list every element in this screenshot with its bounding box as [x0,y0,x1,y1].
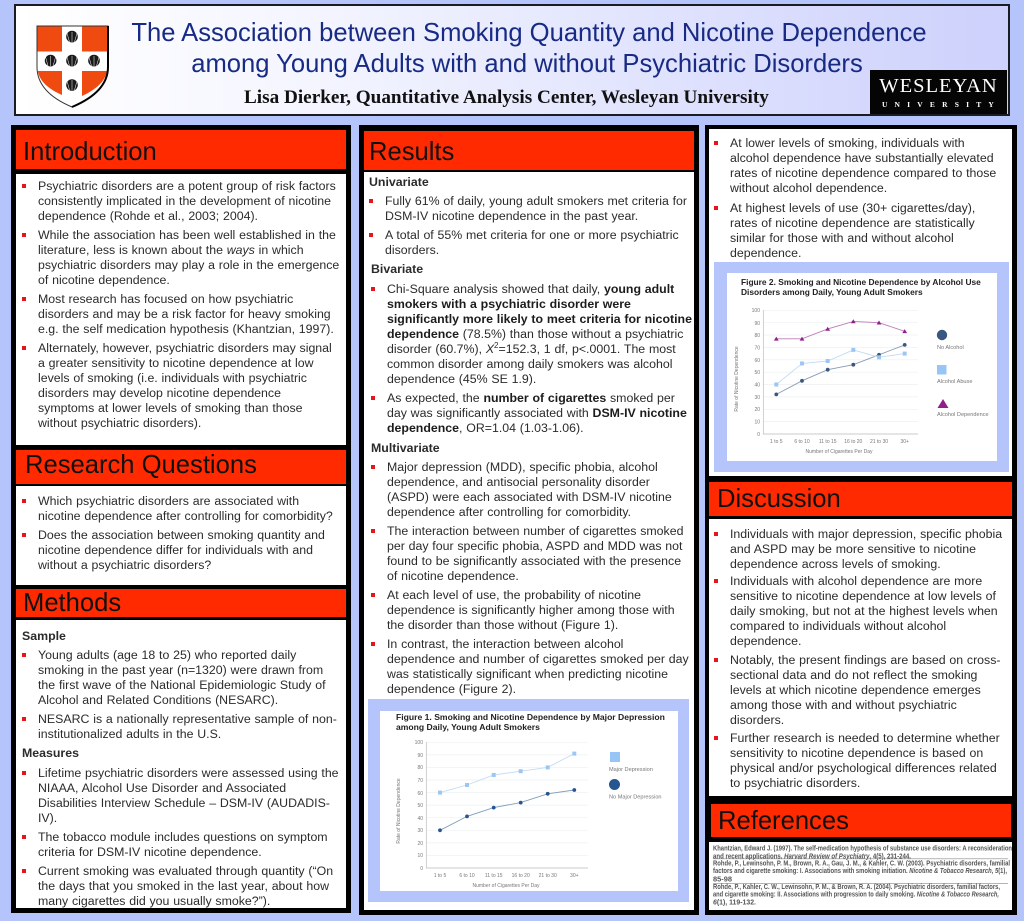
results text: smokers with a psychiatric disorder were [387,297,631,311]
panel: introduction [16,130,346,445]
introduction text: dependence (Rohde et al., 2003; 2004). [38,209,258,223]
introduction text: While the association has been well established in the [38,228,336,242]
heading: Introduction [16,130,346,169]
chart: figure 1: 40 [417,816,423,822]
panel: discussion [709,482,1012,796]
introduction text: symptoms at lower levels of smoking than those [38,401,303,415]
references text: and cigarette smoking: II. Associations with progression to daily smoking. Nicotine & Tobacco Research, [713,890,999,899]
heading: Research Questions: Research Questions [25,451,257,479]
logo: Wesleyan University: WESLEYAN [879,75,998,97]
panel: results continued: rates of nicotine dependence are statistically [730,216,975,230]
chart: figure 2: 10 [754,420,760,426]
title: among Young Adults with and without Psychiatric Disorders [191,50,863,78]
discussion text: dependence. [730,634,801,648]
panel: results continued: At highest levels of use (30+ cigarettes/day), [730,201,975,215]
results text: per day four specific phobia, ASPD and MDD was not [387,539,682,553]
chart: figure 1: Figure 1. Smoking and Nicotine Dependence by Major Depression [396,712,665,722]
discussion text: daily smoking, but not at the highest levels when [730,604,998,618]
title [131,19,927,78]
panel: results continued [709,129,1012,476]
introduction text: e.g. the self medication hypothesis (Khantzian, 1997). [38,322,334,336]
methods text: smoking in the past year (n=1320) were drawn from [38,663,323,677]
results text: At each level of use, the probability of nicotine [387,588,641,602]
chart: figure 1: 50 [417,803,423,809]
discussion text: Further research is needed to determine whether [730,731,1000,745]
results text: dependence and number of cigarettes smoked per day [387,652,689,666]
introduction text: Most research has focused on how psychiatric [38,292,293,306]
references text: 85-98 [713,874,732,883]
research questions text: nicotine dependence after controlling for comorbidity? [38,509,333,523]
chart: figure 1: 10 [417,853,423,859]
methods text: Lifetime psychiatric disorders were assessed using the [38,766,339,780]
chart: figure 2: 1 to 5 [770,439,783,445]
chart: figure 2: 30+ [900,439,909,445]
discussion text: compared to individuals without alcohol [730,619,946,633]
discussion text: sensitive to nicotine dependence at low levels of [730,589,996,603]
logo: Wesleyan University: UNIVERSITY [882,100,1001,109]
chart: figure 1: 16 to 20 [512,873,530,879]
chart: figure 2: 6 to 10 [794,439,810,445]
panel: results continued: dependence. [730,246,801,260]
results text: In contrast, the interaction between alcohol [387,637,623,651]
results text: disorder (60.7%), X2=152.3, 1 df, p<.0001. The most [387,341,676,356]
column 1 backing [11,125,351,913]
introduction text: Alternately, however, psychiatric disorders may signal [38,341,332,355]
chart: figure 1: 6 to 10 [459,873,475,879]
results text: was statistically significant when predicting nicotine [387,667,668,681]
chart: figure 1: 20 [417,841,423,847]
chart: figure 1: Number of Cigarettes Per Day [473,883,540,889]
panel: references [709,804,1012,910]
chart: figure 2: 16 to 20 [844,439,863,445]
research questions text: without a psychiatric disorders? [38,558,211,572]
introduction text: consistently implicated in the development of nicotine [38,194,331,208]
results text: dependence (78.5%) than those without a psychiatric [387,327,683,341]
chart: figure 1: No Major Depression [609,794,662,800]
panel: methods [16,589,346,908]
discussion text: Individuals with alcohol dependence are more [730,574,982,588]
discussion text [709,519,1012,796]
chart: figure 1: Rate of Nicotine Dependence [396,778,402,844]
results text: DSM-IV nicotine dependence in the past year. [385,209,638,223]
discussion text: to psychiatric disorders. [730,776,860,790]
methods text: The tobacco module includes questions on symptom [38,830,328,844]
chart: figure 2: Figure 2. Smoking and Nicotine Dependence by Alcohol Use [741,277,981,287]
methods text: the days that you smoked in the last year, about how [38,879,329,893]
heading: Discussion: Discussion [717,485,841,513]
heading: Results [364,131,694,170]
chart: figure 2: Number of Cigarettes Per Day [806,449,873,455]
chart: figure 1: 1 to 5 [434,873,446,879]
introduction text: literature, less is known about the ways in which [38,243,304,257]
chart: figure 2: 70 [754,346,760,352]
chart: figure 2: 11 to 15 [819,439,837,445]
results text: As expected, the number of cigarettes smoked per [387,391,675,405]
results text: dependence (Figure 2). [387,682,516,696]
panel: results [364,131,694,910]
introduction text [16,174,346,445]
heading: Introduction: Introduction [23,138,157,166]
introduction text: disorders and may be a risk factor for heavy smoking [38,307,331,321]
results text: Univariate [369,175,429,189]
introduction text: levels of smoking (i.e. individuals with psychiatric [38,371,307,385]
introduction text: of nicotine dependence. [38,273,170,287]
chart: figure 1: 11 to 15 [485,873,503,879]
chart: figure 1: 30 [417,828,423,834]
research questions text: Does the association between smoking quantity and [38,528,325,542]
results text: of nicotine dependence. [387,569,519,583]
chart: figure 2: 40 [754,382,760,388]
discussion text: sensitivity to nicotine dependence is based on [730,746,983,760]
chart: figure 1: Major Depression [609,767,653,773]
methods text: NIAAA, Alcohol Use Disorder and Associated [38,781,286,795]
discussion text: dependence across levels of smoking. [730,557,941,571]
panel: results continued: without alcohol dependence. [730,181,887,195]
chart: figure 1: 90 [417,753,423,759]
introduction text: disorders may develop nicotine dependence [38,386,281,400]
icon: university shield [36,26,109,108]
chart: figure 2: 50 [754,370,760,376]
chart: figure 1: 21 to 30 [539,873,557,879]
introduction text: without psychiatric disorders). [38,416,201,430]
research questions text: Which psychiatric disorders are associated with [38,494,299,508]
methods text [16,620,346,908]
results text: dependence is significantly higher among those with [387,603,675,617]
heading: References: References [718,807,849,835]
heading: Research Questions [16,450,346,484]
results text: significantly more likely to meet criteria for nicotine [387,312,692,326]
methods text: many cigarettes did you usually smoke?”). [38,894,270,908]
chart: figure 2: 90 [754,321,760,327]
results text: Multivariate [371,441,440,455]
chart: figure 2: 100 [752,308,760,314]
discussion text: physical and/or psychological differences related [730,761,997,775]
chart: figure 2: 20 [754,407,760,413]
heading: Methods [16,589,346,617]
discussion text: sectional data and do not reflect the smoking [730,668,977,682]
discussion text: levels at which nicotine dependence emerges [730,683,981,697]
chart: figure 2: 21 to 30 [870,439,888,445]
research questions text: nicotine dependence differ for individuals with and [38,543,313,557]
chart: figure 2: Disorders among Daily, Young Adult Smokers [741,287,923,297]
introduction text: a greater sensitivity to nicotine dependence at low [38,356,314,370]
methods text: IV). [38,811,57,825]
methods text: Measures [22,746,79,760]
header banner [14,4,1010,116]
chart: figure 1: 0 [420,866,423,872]
chart: figure 2: 60 [754,358,760,364]
column 3 backing [705,125,1017,915]
methods text: Alcohol and Related Conditions (NESARC). [38,693,278,707]
results text: A total of 55% met criteria for one or more psychiatric [385,228,679,242]
panel: results continued: similar for those with and without alcohol [730,231,954,245]
results text: (ASPD) were each associated with DSM-IV nicotine [387,490,672,504]
methods text: criteria for DSM-IV nicotine dependence. [38,845,262,859]
panel: research questions [16,450,346,585]
methods text: Disabilities Interview Schedule – DSM-IV (AUDADIS- [38,796,330,810]
references text: factors and cigarette smoking: I. Associations with smoking initiation. Nicotine & Tobacco Research, 5(1), [713,866,1007,875]
discussion text: among those with and without psychiatric [730,698,957,712]
chart: figure 1: 70 [417,778,423,784]
methods text: the first wave of the National Epidemiologic Study of [38,678,326,692]
author line: Lisa Dierker, Quantitative Analysis Center, Wesleyan University [244,87,769,108]
heading: Methods: Methods [23,589,121,617]
results text: Fully 61% of daily, young adult smokers met criteria for [385,194,687,208]
results text: dependence (45% SE 1.9). [387,372,536,386]
chart: figure 1 [368,699,689,902]
results text: common disorder among daily smokers was alcohol [387,357,672,371]
panel: results continued: At lower levels of smoking, individuals with [730,136,965,150]
chart: figure 2: Alcohol Abuse [937,379,972,385]
results text: dependence, and antisocial personality disorder [387,475,650,489]
references text [709,842,1012,910]
chart: figure 1: 100 [415,740,423,746]
methods text: Young adults (age 18 to 25) who reported daily [38,648,296,662]
chart: figure 1: 80 [417,765,423,771]
results text: day was significantly associated with DSM-IV nicotine [387,406,687,420]
chart: figure 1: among Daily, Young Adult Smokers [396,722,540,732]
methods text: Current smoking was evaluated through quantity (“On [38,864,333,878]
chart: figure 1: 30+ [570,873,579,879]
results text: Major depression (MDD), specific phobia, alcohol [387,460,658,474]
heading: Discussion [709,482,1012,516]
results text: dependence after controlling for comorbidity. [387,505,631,519]
chart: figure 2: No Alcohol [937,345,964,351]
chart: figure 2: 0 [757,432,760,438]
results text: The interaction between number of cigarettes smoked [387,524,683,538]
references text: and recent applications. Harvard Review of Psychiatry, 4(5), 231-244. [713,851,911,860]
title: The Association between Smoking Quantity and Nicotine Dependence [131,19,927,47]
methods text: Sample [22,629,66,643]
logo: Wesleyan University [870,70,1007,114]
discussion text: Individuals with major depression, specific phobia [730,527,1002,541]
chart: figure 2: Rate of Nicotine Dependence [734,346,740,412]
panel: results continued: rates of nicotine dependence compared to those [730,166,996,180]
introduction text: psychiatric disorders may play a role in the emergence [38,258,339,272]
discussion text: Notably, the present findings are based on cross- [730,653,1001,667]
results text: the disorder than those without (Figure 1). [387,618,618,632]
chart: figure 1: 60 [417,791,423,797]
discussion text: disorders. [730,713,784,727]
results text: Chi-Square analysis showed that daily, young adult [387,282,674,296]
introduction text: Psychiatric disorders are a potent group of risk factors [38,179,336,193]
methods text: NESARC is a nationally representative sample of non- [38,712,337,726]
references text: 6(1), 119-132. [713,898,756,907]
panel: results continued: alcohol dependence have substantially elevated [730,151,994,165]
heading: Results: Results [369,138,454,166]
chart: figure 2: 80 [754,333,760,339]
chart: figure 2 [714,262,1009,472]
results text: disorders. [385,243,439,257]
research questions text [16,486,346,585]
heading: References [711,804,1011,837]
methods text: institutionalized adults in the U.S. [38,727,221,741]
results text [364,172,694,910]
results text: Bivariate [371,262,423,276]
results text: dependence, OR=1.04 (1.03-1.06). [387,421,584,435]
column 2 backing [359,125,699,915]
discussion text: and ASPD may be more sensitive to nicotine [730,542,976,556]
chart: figure 2: 30 [754,395,760,401]
results text: found to be significantly associated with the presence [387,554,681,568]
chart: figure 2: Alcohol Dependence [937,412,989,418]
